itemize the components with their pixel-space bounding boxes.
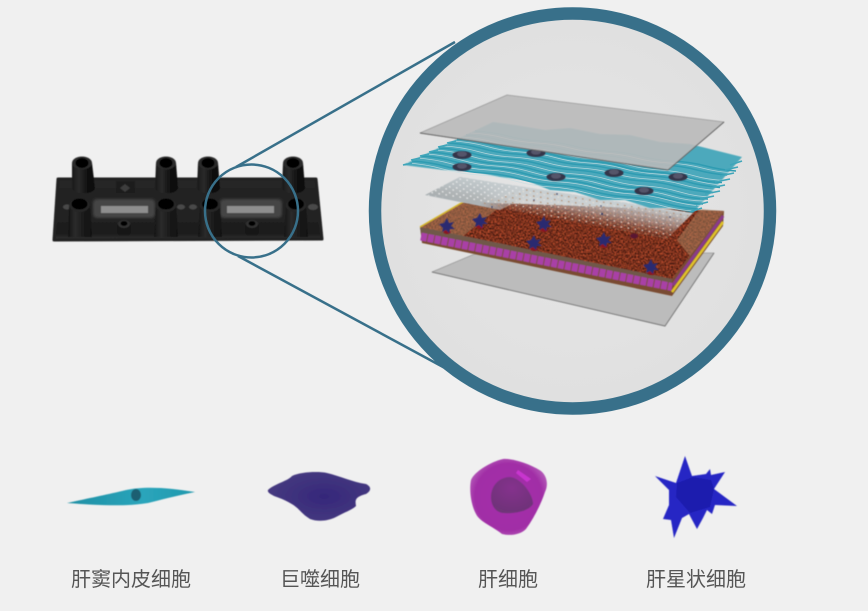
- stellate cells in block: [439, 213, 659, 275]
- bottom plate: [432, 253, 714, 326]
- chip base plate: [54, 179, 322, 240]
- window left: [93, 199, 155, 218]
- logo mark: [116, 181, 135, 193]
- macrophages on sheet: [452, 149, 688, 195]
- cell: stellate: [655, 456, 737, 538]
- nucleus: [491, 477, 533, 513]
- exploded chip layers: [403, 95, 742, 326]
- cell: macrophage: [268, 472, 370, 521]
- endothelial sheet: [403, 122, 742, 213]
- label: hepatocytes: 肝细胞: [478, 568, 538, 591]
- small centre ports: [117, 220, 259, 235]
- block top surface: [420, 202, 724, 279]
- hepatocyte row: [421, 236, 672, 287]
- labels: [71, 568, 746, 591]
- tissue block: [420, 202, 724, 296]
- highlights: [516, 470, 531, 482]
- porous membrane: [425, 177, 693, 239]
- lighter corners: [420, 202, 497, 236]
- top side strip: [420, 227, 672, 283]
- microfluidic chip device: [54, 156, 322, 240]
- rear ports: [72, 156, 305, 193]
- label: sinusoidal endothelial cells: 肝窦内皮细胞: [71, 568, 191, 591]
- side tabs: [63, 204, 318, 210]
- window right: [220, 199, 282, 218]
- cell: hepatocyte: [470, 459, 547, 535]
- cell: liver sinusoidal endothelial: [67, 488, 195, 505]
- label: stellate cells: 肝星状细胞: [646, 568, 746, 591]
- top plate: [420, 95, 724, 170]
- zoom connector lines: [236, 42, 456, 374]
- front ports: [68, 198, 308, 237]
- block side body: [420, 211, 724, 296]
- yellow edges: [420, 202, 723, 292]
- fibre tips: [403, 141, 742, 212]
- small magnifier circle: [205, 164, 298, 258]
- nucleus: [131, 489, 141, 501]
- magnified lens circle: [375, 14, 770, 408]
- label: macrophages: 巨噬细胞: [280, 568, 360, 591]
